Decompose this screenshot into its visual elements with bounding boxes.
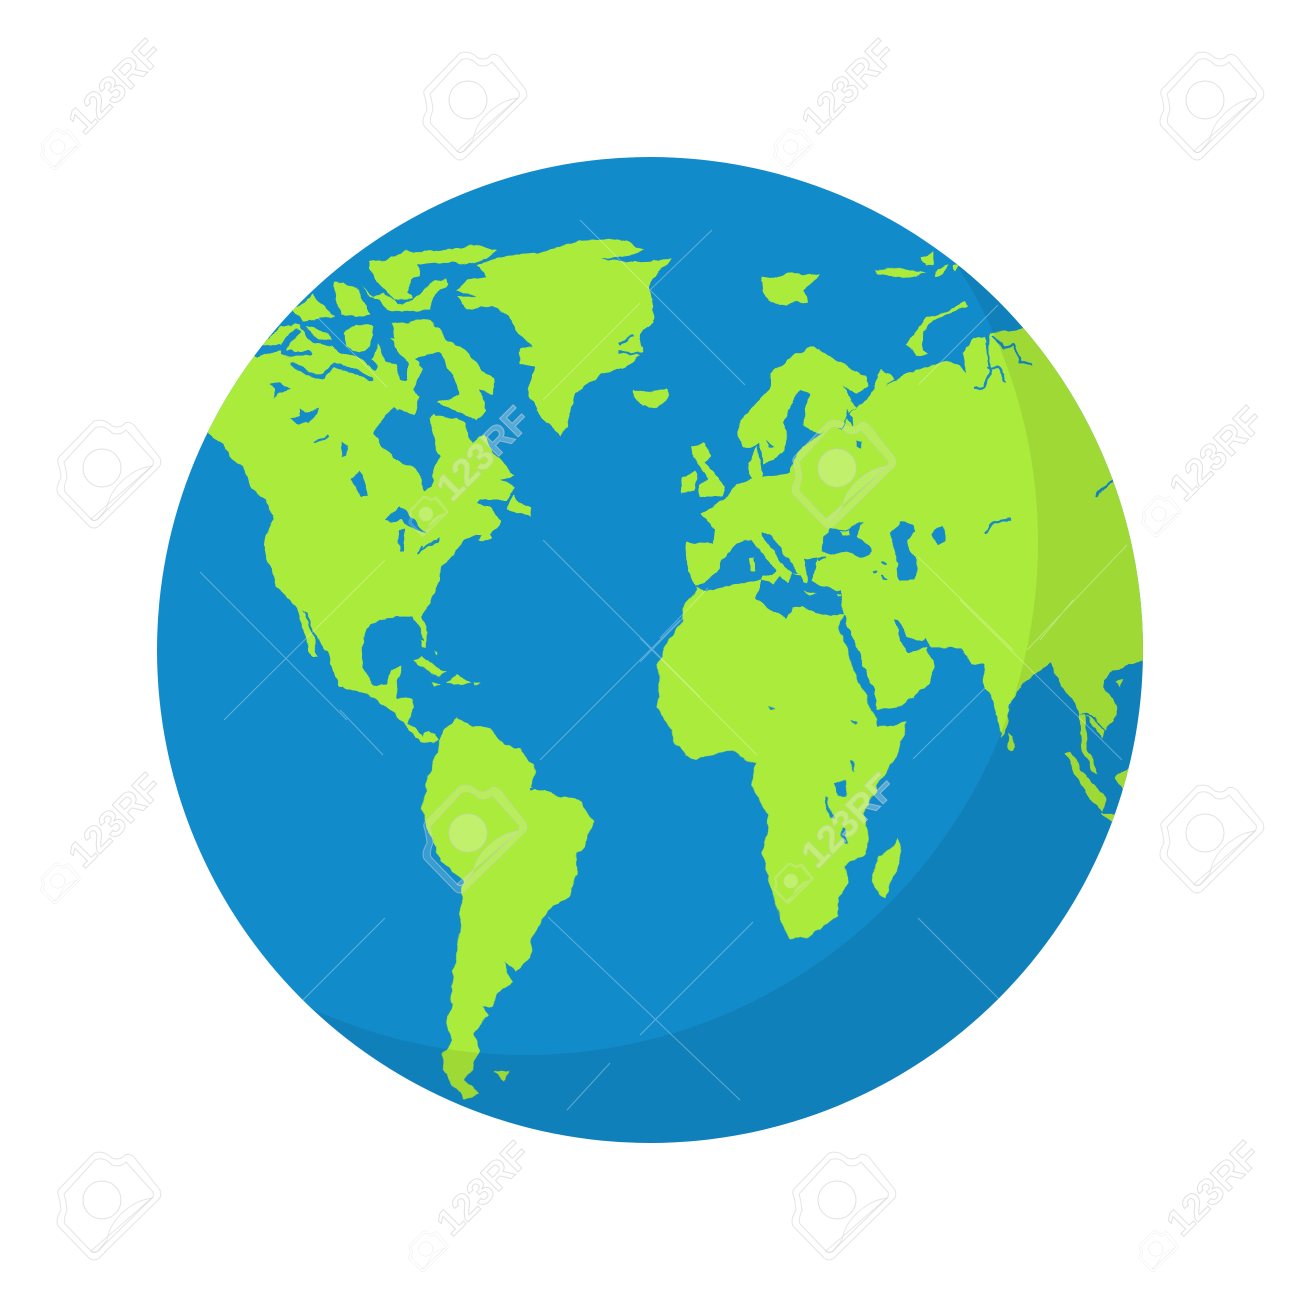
- ocean disc: [157, 157, 1143, 1143]
- Sri Lanka: [1007, 732, 1015, 752]
- land masses: [200, 238, 1173, 1100]
- diagonal lines: [200, 220, 1127, 1110]
- Southern Asia and Arabia: [840, 580, 1173, 822]
- Mediterranean islands: [750, 558, 755, 570]
- Greenland: [457, 238, 673, 435]
- watermarks: 123RF text: 123RF: [429, 1134, 539, 1244]
- Great Britain: [692, 443, 725, 497]
- Sumatra: [1065, 752, 1105, 812]
- North America and Greenland: [200, 238, 673, 743]
- watermarks: 123RF text: 123RF: [794, 766, 904, 876]
- African lakes: [768, 706, 857, 843]
- South America and Caribbean: [412, 640, 593, 1100]
- Madagascar: [872, 837, 902, 898]
- watermarks: 123RF text: 123RF: [61, 32, 171, 142]
- Rivers and small lakes: [873, 337, 1113, 583]
- watermarks: 123RF text: 123RF: [1162, 399, 1272, 509]
- Hispaniola: [447, 675, 472, 685]
- continents and shading: [200, 220, 1143, 1143]
- Falkland Islands: [493, 1070, 508, 1080]
- Java: [1102, 813, 1115, 822]
- Adriatic: [762, 532, 798, 573]
- Arctic channels: [254, 325, 424, 554]
- Persian Gulf: [894, 619, 928, 653]
- Hainan: [1115, 678, 1123, 688]
- Novaya Zemlya: [907, 302, 967, 357]
- Borneo: [1115, 768, 1128, 790]
- Baja California: [295, 607, 318, 657]
- Eurasia upper: [682, 252, 1160, 618]
- watermarks: 123RF text: 123RF: [429, 399, 539, 509]
- Ireland: [682, 470, 698, 493]
- Cuba: [412, 657, 447, 677]
- watermarks: 123RF text: 123RF: [1159, 1134, 1269, 1244]
- Malay Peninsula: [1079, 713, 1099, 775]
- watermarks: 123RF text: 123RF: [61, 766, 171, 876]
- Franz Josef Land: [875, 267, 927, 278]
- Jamaica: [432, 682, 442, 687]
- Mediterranean: [693, 538, 852, 618]
- shaded crescent: [312, 264, 1143, 1143]
- Seas and lakes of Eurasia: [693, 408, 947, 618]
- Africa: [657, 587, 907, 940]
- Scandinavia: [738, 347, 868, 463]
- Svalbard: [762, 273, 820, 307]
- Hudson Bay and lakes: [268, 333, 487, 553]
- Iceland: [633, 388, 670, 408]
- Arctic islands: [370, 245, 497, 300]
- watermarks: 123RF text: 123RF: [794, 32, 904, 142]
